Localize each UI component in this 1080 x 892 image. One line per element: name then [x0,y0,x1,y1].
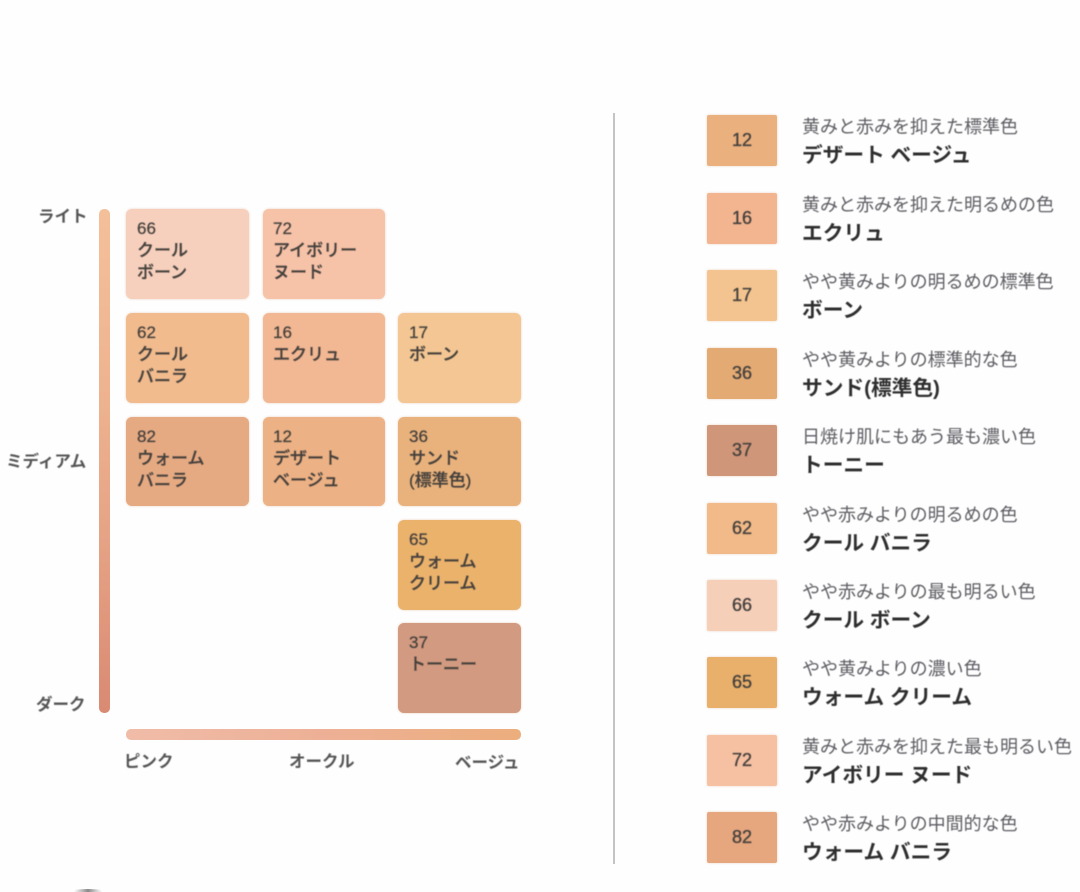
tile: 62 cool vanilla [126,313,249,403]
tile: 36 sand: 36 サンド (標準色) [409,427,471,490]
divider [613,113,615,864]
tile: 37 tawny [398,623,521,713]
legend row: 65: ウォーム クリーム [802,686,972,709]
legend row: 62: やや赤みよりの明るめの色 [802,505,1018,525]
cropped mark at bottom edge [74,889,102,892]
tile: 82 warm vanilla: 82 ウォーム バニラ [137,427,204,490]
legend row: 16: 黄みと赤みを抑えた明るめの色 [802,195,1054,215]
legend row: 16 [706,192,1054,245]
legend row: 62: クール バニラ [802,532,932,555]
vertical axis bar: light to dark [99,209,110,713]
axis label: beige: ベージュ [455,754,520,772]
legend row: 72 [706,734,1072,787]
legend row: 36 [706,347,1018,400]
legend row: 82: やや赤みよりの中間的な色 [802,814,1018,834]
legend row: 72: アイボリー ヌード [802,764,972,787]
legend row: 16: エクリュ [802,222,885,245]
legend row: 17: やや黄みよりの明るめの標準色 [802,272,1054,292]
legend row: 16: 16 [732,208,752,228]
legend row: 12 [706,114,1018,167]
panel: shade legend list [706,114,1072,864]
tile: 65 warm cream [398,520,521,610]
legend row: 37: 37 [732,440,752,460]
axis label: dark: ダーク [36,696,86,714]
tile: 12 desert beige [263,417,385,506]
axis label: light: ライト [38,208,88,226]
legend row: 72: 黄みと赤みを抑えた最も明るい色 [802,737,1072,757]
legend row: 17: 17 [732,285,752,305]
tile: 12 desert beige: 12 デザート ベージュ [273,427,341,490]
legend row: 65 [706,656,982,709]
tile: 72 ivory nude: 72 アイボリー ヌード [273,219,357,282]
legend row: 36: 36 [732,363,752,383]
legend row: 82 [706,811,1018,864]
tile: 16 ecru: 16 エクリュ [273,323,341,364]
legend row: 65: 65 [732,672,752,692]
tile: 16 ecru [263,313,385,403]
tile: 37 tawny: 37 トーニー [409,633,477,674]
legend row: 37 [706,424,1036,477]
legend row: 65: やや黄みよりの濃い色 [802,659,982,679]
tile: 66 cool bone: 66 クール ボーン [137,219,188,282]
tile: 17 bone [398,313,521,403]
legend row: 12: 黄みと赤みを抑えた標準色 [802,117,1018,137]
legend row: 37: トーニー [802,454,885,477]
tile: 36 sand [398,417,521,506]
legend row: 12: 12 [732,130,752,150]
axis label: pink: ピンク [124,753,174,771]
tile: 65 warm cream: 65 ウォーム クリーム [409,530,476,593]
legend row: 66 [706,579,1036,632]
legend row: 12: デザート ベージュ [802,144,971,167]
legend row: 62 [706,502,1018,555]
tile: 66 cool bone [126,209,249,299]
tile: 72 ivory nude [263,209,385,299]
legend row: 36: サンド(標準色) [802,377,940,400]
axis label: medium: ミディアム [6,453,86,471]
tile: 17 bone: 17 ボーン [409,323,459,364]
legend row: 82: ウォーム バニラ [802,841,952,864]
legend row: 72: 72 [732,750,752,770]
panel: shade matrix chart [6,208,522,772]
tile: 62 cool vanilla: 62 クール バニラ [137,323,188,386]
legend row: 37: 日焼け肌にもあう最も濃い色 [802,427,1036,447]
tile: 82 warm vanilla [126,417,249,506]
legend row: 66: やや赤みよりの最も明るい色 [802,582,1036,602]
horizontal axis bar: pink to beige [126,729,521,740]
legend row: 66: クール ボーン [802,609,931,632]
axis label: ochre: オークル [289,753,355,771]
legend row: 62: 62 [732,518,752,538]
legend row: 17: ボーン [802,299,863,322]
legend row: 17 [706,269,1054,322]
legend row: 36: やや黄みよりの標準的な色 [802,350,1018,370]
legend row: 82: 82 [732,827,752,847]
legend row: 66: 66 [732,595,752,615]
